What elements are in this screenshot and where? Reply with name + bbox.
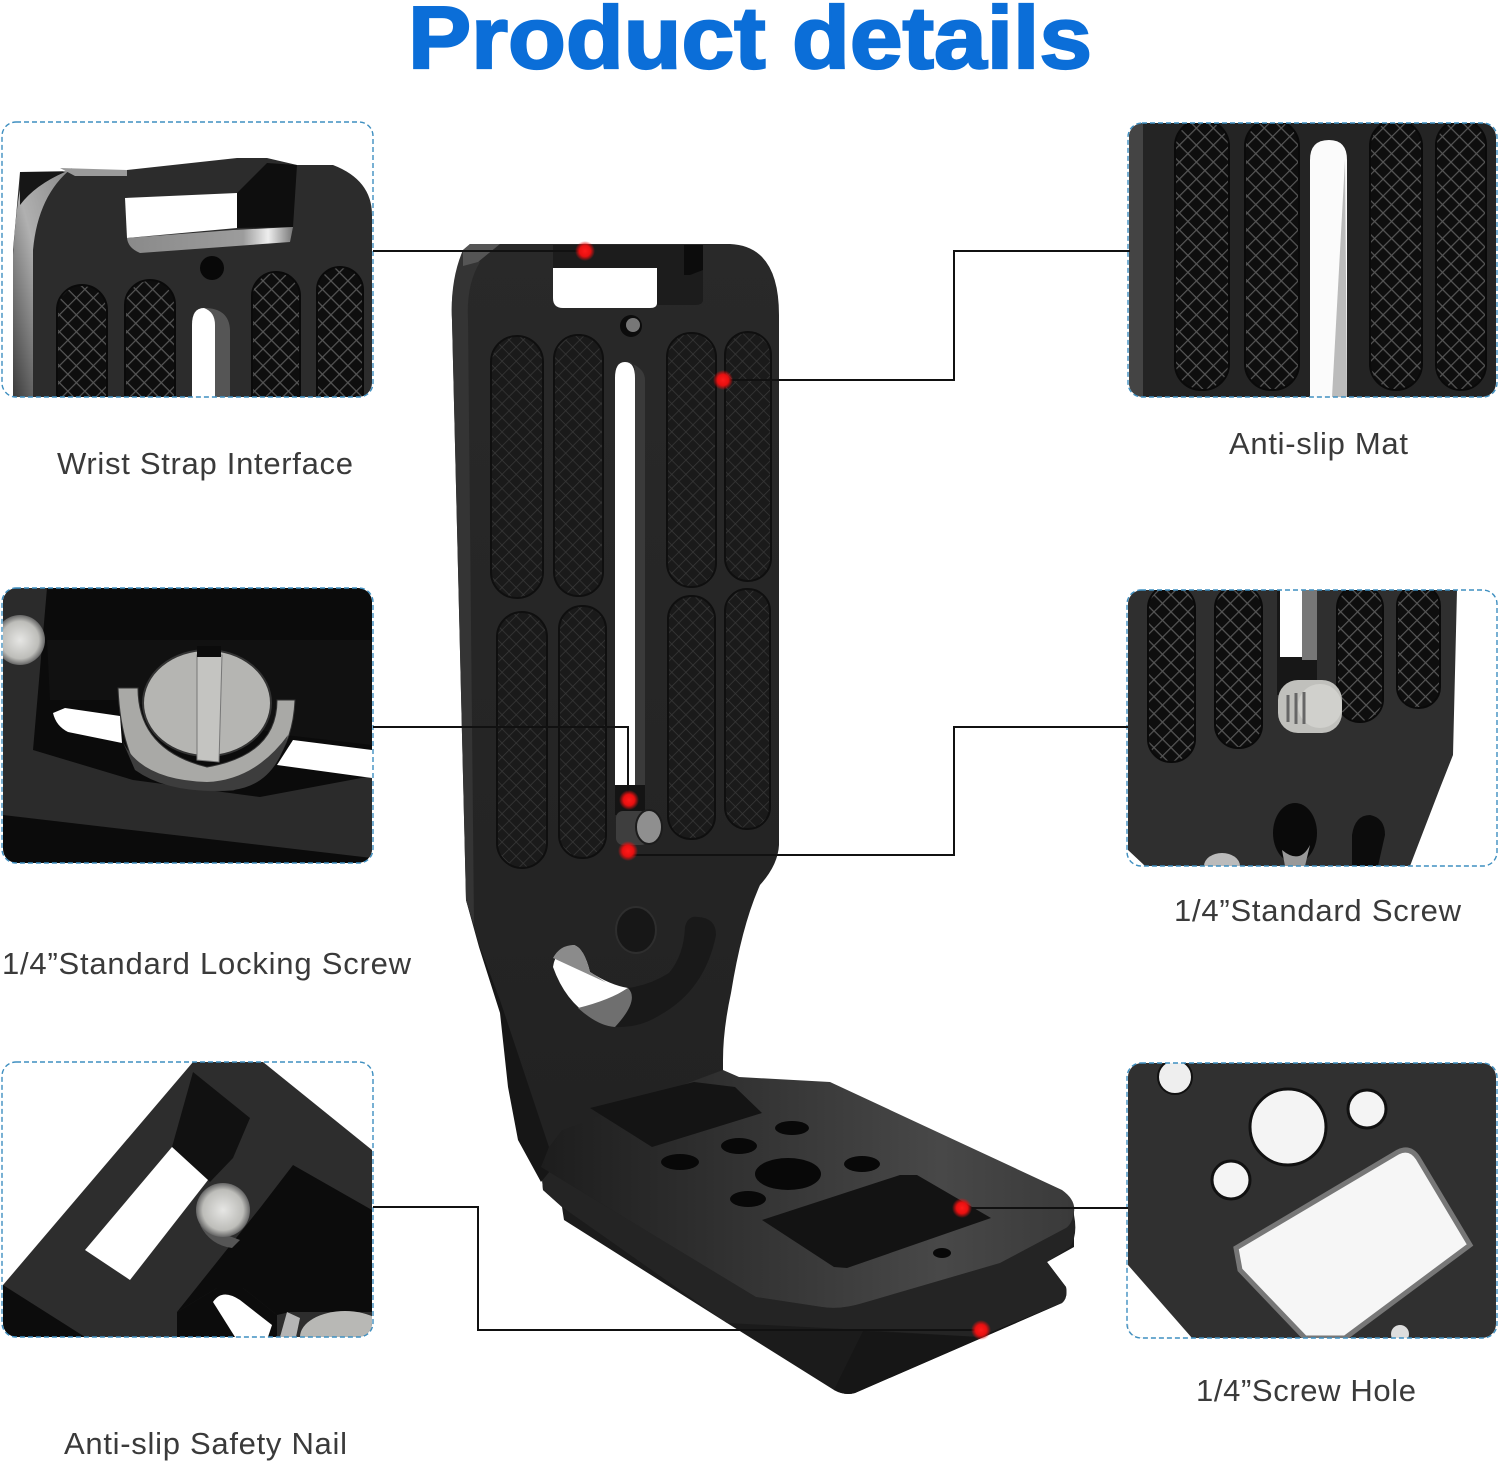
leader line: locking screw xyxy=(373,727,628,800)
leader line: safety nail xyxy=(373,1207,981,1330)
neck holes xyxy=(616,907,656,953)
bracket base slab xyxy=(541,1167,1074,1394)
red marker dots xyxy=(575,241,991,1340)
strap slot xyxy=(463,244,703,308)
label: standard screw: 1/4”Standard Screw xyxy=(1174,893,1462,928)
leader line: screw hole xyxy=(962,1207,1128,1209)
panel: anti-slip mat xyxy=(1128,120,1497,397)
small top screw xyxy=(620,315,642,337)
leader line: anti-slip mat xyxy=(723,251,1130,380)
leader line: wrist strap xyxy=(373,250,585,252)
plate left bevel xyxy=(452,250,480,925)
panel: screw hole xyxy=(1127,1060,1497,1343)
base recesses xyxy=(590,1082,762,1147)
bracket base plate surface xyxy=(541,1070,1074,1308)
label: screw hole: 1/4”Screw Hole xyxy=(1196,1373,1416,1408)
thumb screw on slot xyxy=(615,785,662,845)
L-bracket product xyxy=(452,244,1075,1394)
base holes xyxy=(661,1121,951,1258)
bracket back edge xyxy=(466,900,600,1182)
label: wrist strap interface: Wrist Strap Interface xyxy=(57,446,353,481)
label: anti-slip mat: Anti-slip Mat xyxy=(1229,426,1408,461)
label: standard locking screw: 1/4”Standard Locking Screw xyxy=(2,946,412,981)
leader line: standard screw xyxy=(628,727,1128,855)
panel: standard locking screw xyxy=(0,588,373,863)
centre slot xyxy=(615,362,635,790)
panel: standard screw xyxy=(1127,585,1497,879)
label: anti-slip safety nail: Anti-slip Safety Nail xyxy=(64,1426,347,1461)
bracket vertical plate xyxy=(452,244,779,1147)
knurled pads xyxy=(491,332,771,868)
panel: wrist strap interface xyxy=(2,122,373,425)
panel: anti-slip safety nail xyxy=(1,1061,374,1338)
